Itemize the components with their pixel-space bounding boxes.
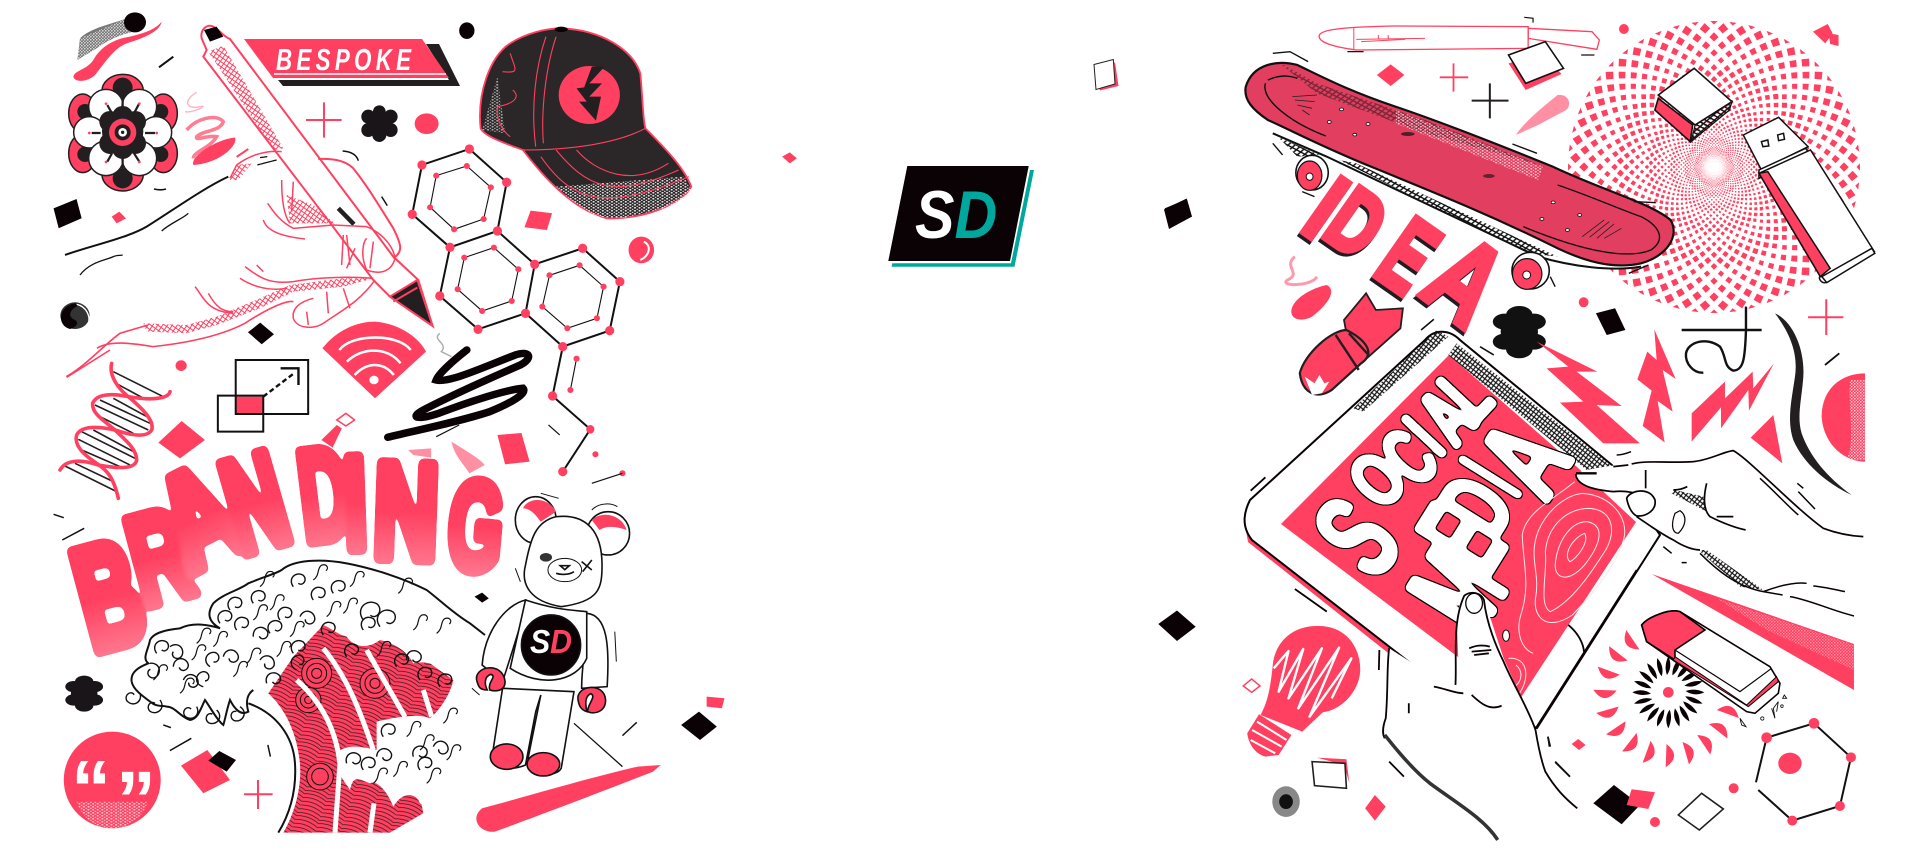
icon: pen outline and top-row marks [1165,17,1839,228]
pink paint scribble right [1286,257,1331,320]
illustration: hand below tablet [1251,477,1577,840]
title lettering: BRANDING: B [58,510,160,683]
icon: USB drive [1743,117,1875,283]
triangle [1751,415,1782,463]
icon: bomb [1300,293,1403,395]
title lettering: BRANDING: I [341,429,370,578]
icon: baseball cap [480,27,691,218]
small diamonds above branding [321,413,530,473]
icon: resize squares with dashed arrow [218,360,308,432]
illustration: hand at right of tablet [1576,450,1863,617]
title lettering: SOCIAL: O [1331,435,1424,525]
icon: DNA helix [60,350,205,498]
black diamond lower center right [1158,610,1196,641]
icon: marker pen [201,26,433,326]
title lettering: BRANDING: N [207,424,304,583]
small marks bottom left [54,514,724,832]
icon: hexagon with dots [1756,718,1856,826]
quotation marks: ” [116,755,156,844]
quotation marks: “ [71,744,111,833]
tablet frame [1245,332,1660,728]
title lettering: IDEA: E [1358,197,1459,316]
title lettering: MEDIA: M [1381,526,1535,654]
title lettering: BRANDING: D [291,420,359,570]
title lettering: SOCIAL: S [1286,472,1426,601]
panel: branding illustration (left) [54,12,797,844]
panel: center SD logo [888,166,1034,267]
tablet screen [1281,355,1636,702]
illustration: tablet [1245,330,1660,728]
icon: squiggle glyph and thick swoop [1682,307,1865,495]
tablet fingerprint lines [1503,482,1625,695]
title lettering: MEDIA: D [1416,457,1536,555]
small outlined square top center [1094,60,1118,90]
title lettering: IDEA: D [1309,168,1405,277]
bear chest logo text: SD [530,623,572,660]
tablet corner lines [1536,570,1637,728]
title lettering: BRANDING: A [133,434,266,601]
title lettering: SOCIAL: L [1420,350,1511,437]
droplets [1740,695,1787,727]
logo teal offset [892,170,1034,267]
small shapes [1548,738,1739,830]
illustration: toy bear figure [472,493,630,776]
title lettering: SOCIAL: I [1387,401,1461,471]
icon: wifi [322,322,426,398]
small shapes left column [54,22,797,371]
illustration: great wave [125,561,487,833]
icon: hand holding pen [65,151,400,333]
sunburst petals [1593,620,1744,768]
icon: flower mandala [69,74,177,191]
icon: skateboard [1245,52,1674,289]
bolt three [1692,363,1774,442]
black diamond center right [1164,198,1192,229]
title lettering: MEDIA: I [1440,443,1542,512]
icon: lightning bolts [1537,329,1782,463]
banner text: BESPOKE [276,42,415,77]
title lettering: IDEA: A [1402,211,1529,350]
title lettering: SOCIAL: C [1362,412,1456,503]
panel: social media illustration (right) [1165,0,1915,840]
long pink wedge [1652,574,1854,690]
logo letters: SD [915,176,997,253]
icon: rubber eraser [1642,611,1780,713]
bolt two [1637,329,1676,442]
banner: bespoke [244,39,460,86]
title lettering: MEDIA: A [1451,398,1598,519]
icon: quote bubble [64,732,161,828]
pink square and black square [181,750,273,809]
title lettering: BRANDING: R [113,480,206,634]
moire circle pattern [1513,0,1915,372]
title lettering: SOCIAL [1286,350,1511,601]
logo black plate [888,166,1029,261]
icon: eraser cube [1655,68,1732,142]
chemical hexagon structure [408,144,626,483]
tablet hatched bezels [1353,330,1613,470]
marks around cloud and squiggle [1421,297,1843,358]
icon: pink paint scribble [185,92,248,165]
title lettering: SOCIAL: A [1399,371,1493,462]
title lettering: BRANDING [58,420,509,683]
quotation marks [71,744,156,844]
title lettering: BRANDING: N [371,436,441,589]
icon: light bulb [1247,626,1360,757]
bulb and lower-left marks [1243,626,1386,821]
bolt one [1537,342,1640,443]
title lettering: MEDIA: E [1391,484,1533,595]
bottom-right cluster [1536,570,1856,830]
title lettering: IDEA [1286,158,1529,350]
title lettering: BRANDING: G [443,454,509,599]
icon: brush stroke with swoosh [73,12,173,81]
tablet pink edge [1245,525,1445,698]
icon: scribble line [388,333,529,437]
title lettering: MEDIA [1381,398,1598,654]
arm lower outline [66,301,293,377]
small marks near banner [60,102,439,329]
title lettering: IDEA: I [1286,158,1365,258]
